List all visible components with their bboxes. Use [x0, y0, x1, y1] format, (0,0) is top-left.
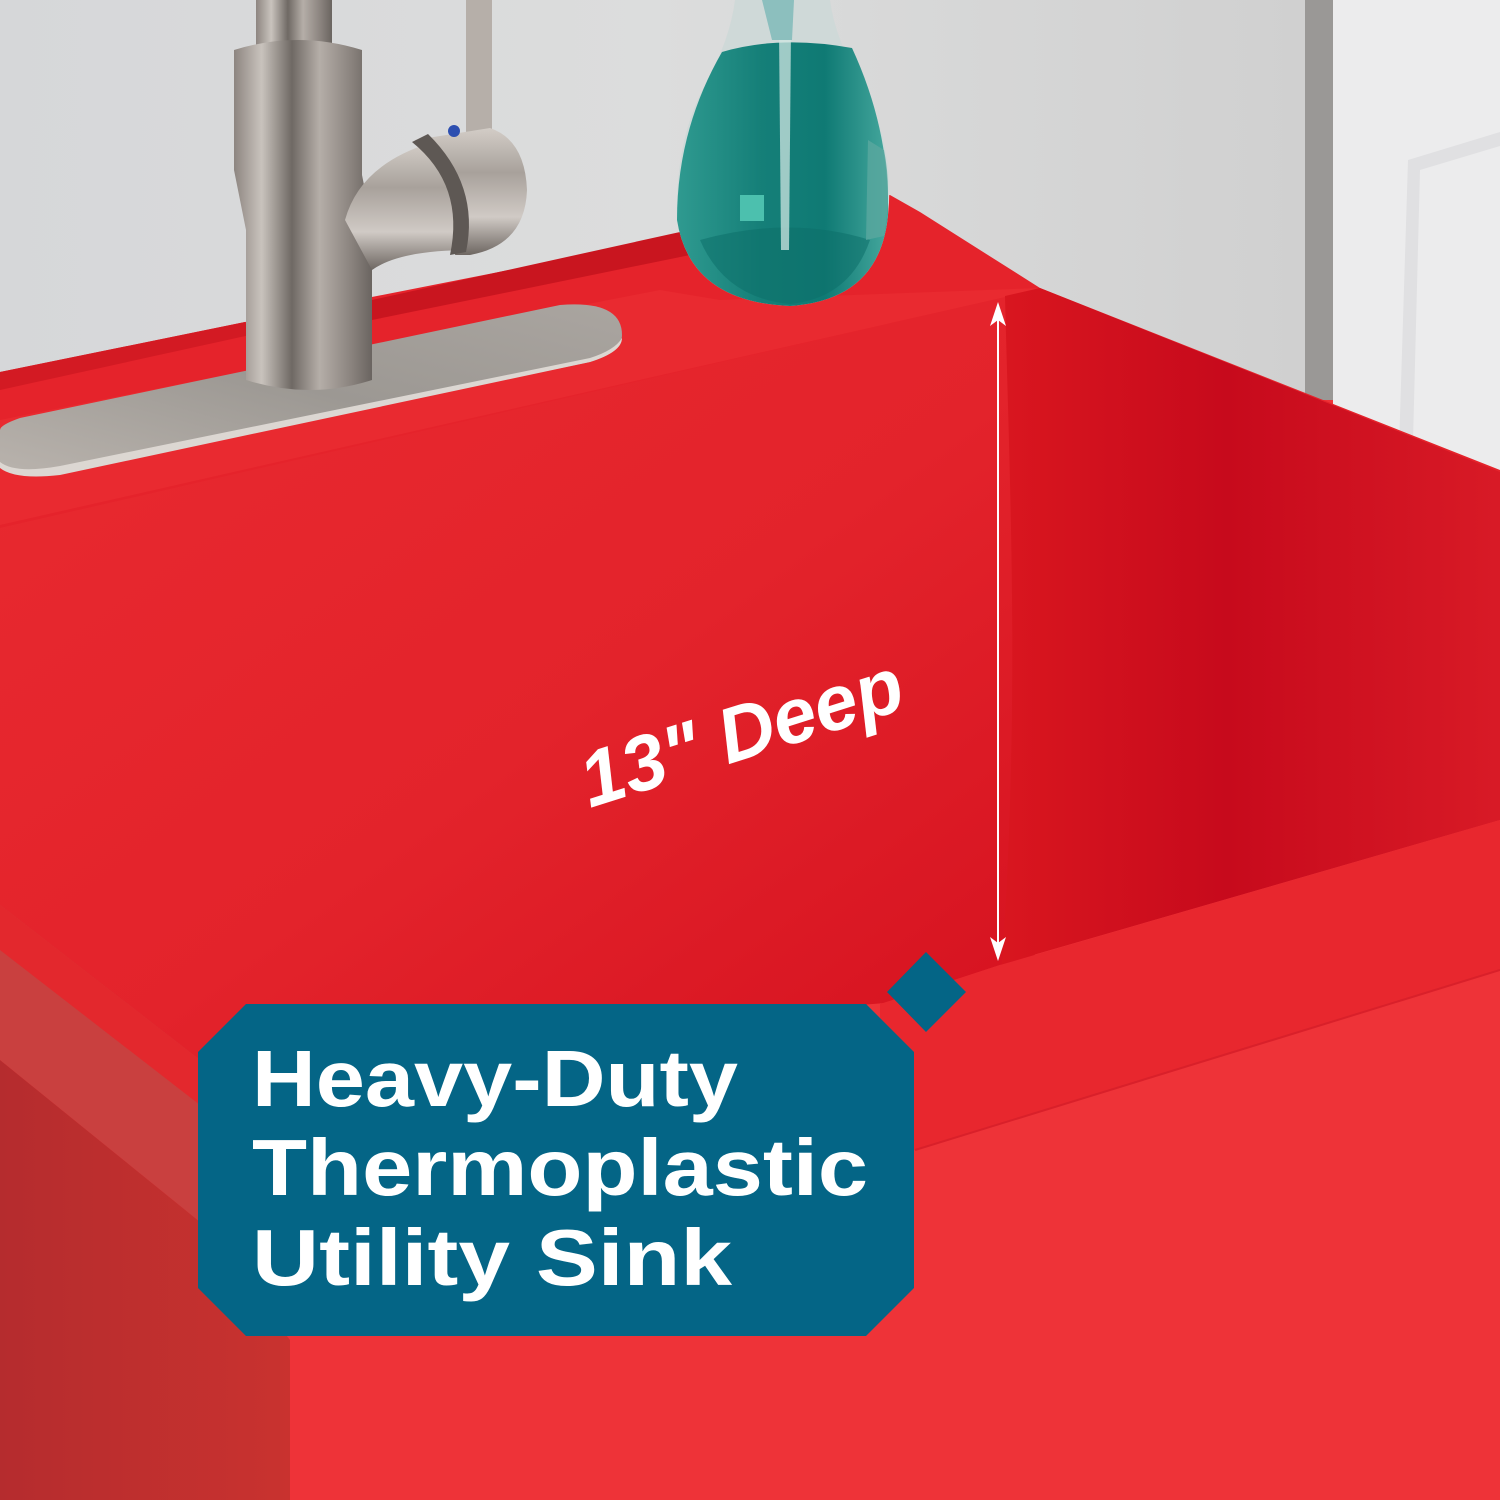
callout: material label [198, 1004, 914, 1336]
panel: lower front face [290, 972, 1500, 1500]
icon: callout diamond [887, 952, 966, 1032]
background: cabinet edge [1305, 0, 1335, 400]
arrow: depth dimension [990, 302, 1006, 961]
panel: sink deck [0, 195, 1500, 560]
callout text: Thermoplastic [252, 1123, 868, 1212]
panel: front rim [880, 820, 1500, 1150]
panel: left rim [0, 905, 200, 1222]
icon: soap bottle [677, 0, 889, 306]
background: white cabinet [1333, 0, 1500, 480]
callout text: Utility Sink [252, 1213, 733, 1302]
callout background [198, 1004, 914, 1336]
panel: inner front wall [0, 296, 1035, 1060]
panel: inner side wall [1002, 288, 1500, 964]
callout text: Heavy-Duty [252, 1034, 739, 1123]
icon: faucet [234, 0, 527, 390]
panel: left lower face [0, 1060, 290, 1500]
callout text [252, 1034, 868, 1302]
text: depth label: 13" Deep [569, 640, 914, 824]
panel: front rim crease [915, 970, 1500, 1150]
background: wall [0, 0, 1310, 400]
icon: faucet base plate [0, 304, 622, 476]
